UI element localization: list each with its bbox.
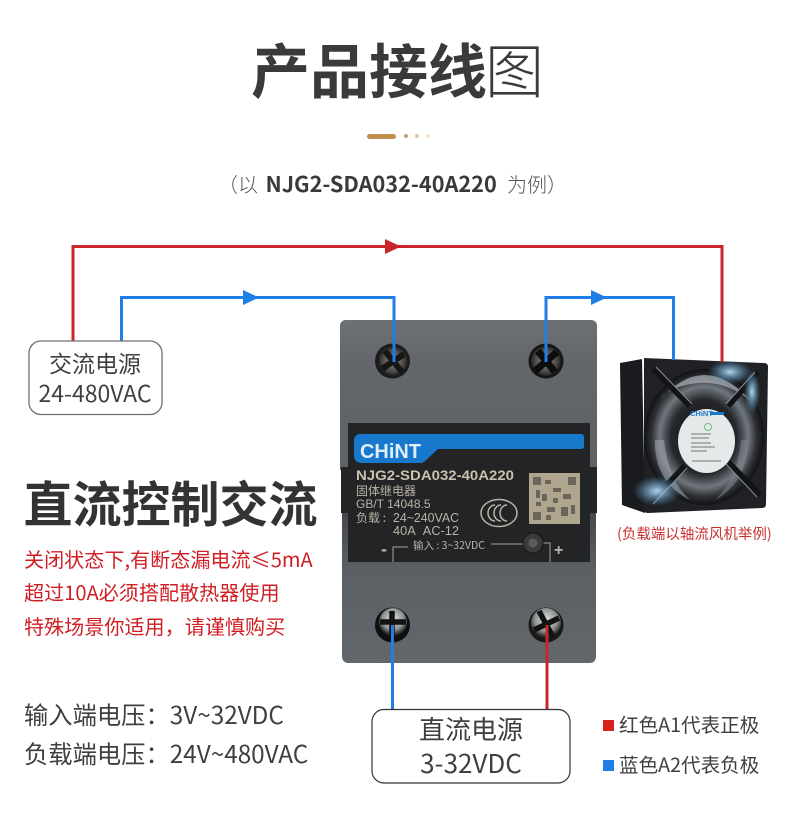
AC power box: 24-480VAC <box>38 375 152 409</box>
relay specifications: 固体继电器 <box>356 482 416 499</box>
fan lower right sheen <box>715 440 748 500</box>
red live wire loop <box>73 239 722 362</box>
AC power box: 交流电源 <box>49 345 141 379</box>
CCC mark <box>481 500 517 526</box>
arrow: blue wire left <box>243 290 259 305</box>
DC power box: 直流电源 <box>419 710 523 747</box>
warning text <box>24 544 313 640</box>
arrow: red wire <box>385 239 401 254</box>
fan center label <box>678 409 735 473</box>
title: 产品接线 <box>251 25 487 110</box>
warning text: 关闭状态下,有断态漏电流≤5mA <box>24 544 313 573</box>
input terminal legend: - <box>381 539 387 559</box>
screw bottom left <box>375 608 410 642</box>
fan caption: (负载端以轴流风机举例) <box>617 523 772 544</box>
DC power box <box>372 710 570 783</box>
screw top left <box>375 344 410 378</box>
fan right glow <box>744 370 760 414</box>
arrow: blue wire right <box>591 290 607 305</box>
fan center label: CHiNT <box>690 409 713 418</box>
input terminal legend: 输入 : 3~32VDC <box>413 538 485 553</box>
blue wire to relay <box>122 290 394 362</box>
fan lower left sheen <box>655 440 690 500</box>
relay specifications: GB/T 14048.5 <box>356 497 431 511</box>
fan strut edges <box>653 367 757 504</box>
AC power box <box>29 341 162 414</box>
legend: red: 红色A1代表正极 <box>619 709 759 738</box>
voltage specifications: 输入端电压：3V~32VDC <box>24 696 284 731</box>
screw bottom right <box>528 608 564 642</box>
fan front frame <box>644 358 768 513</box>
fan sheen <box>660 375 750 400</box>
screw top right <box>528 344 564 378</box>
blue wire to fan <box>546 290 674 362</box>
blue control wire <box>391 625 394 710</box>
warning text: 超过10A必须搭配散热器使用 <box>24 577 280 606</box>
fan blades <box>644 369 764 505</box>
legend: blue: 蓝色A2代表负极 <box>619 749 759 778</box>
red control wire <box>546 625 548 710</box>
relay label plate <box>341 423 597 562</box>
voltage specifications <box>24 696 308 770</box>
model number: NJG2-SDA032-40A220 <box>356 467 514 483</box>
title: 图 <box>485 25 544 110</box>
relay specifications: 40A AC-12 <box>393 523 459 538</box>
DC power box: 3-32VDC <box>420 744 522 781</box>
QR code <box>529 473 580 524</box>
relay bottom grey body <box>342 513 596 663</box>
subtitle <box>218 168 567 199</box>
decorative title marker <box>367 134 430 139</box>
relay specifications <box>356 482 459 538</box>
warning text: 特殊场景你适用，请谨慎购买 <box>24 611 285 640</box>
fan lower glow <box>633 476 681 506</box>
voltage specifications: 负载端电压：24V~480VAC <box>24 735 308 770</box>
subtitle: NJG2-SDA032-40A220 <box>266 168 497 199</box>
main heading: 直流控制交流 <box>24 466 318 537</box>
subtitle: 为例） <box>507 169 567 198</box>
fan top glow <box>708 360 752 384</box>
relay module <box>340 320 597 663</box>
input terminal legend: + <box>554 542 563 559</box>
input terminal legend <box>381 533 563 562</box>
subtitle: （以 <box>218 169 258 198</box>
brand logo: CHiNT <box>360 441 421 463</box>
relay specifications: 24~240VAC <box>393 510 459 525</box>
relay specifications: 负载 : <box>356 509 386 526</box>
relay top grey body <box>340 320 597 470</box>
fan rear frame <box>620 359 645 513</box>
fan struts <box>650 368 760 503</box>
fan <box>620 358 768 513</box>
brand band <box>354 434 584 463</box>
